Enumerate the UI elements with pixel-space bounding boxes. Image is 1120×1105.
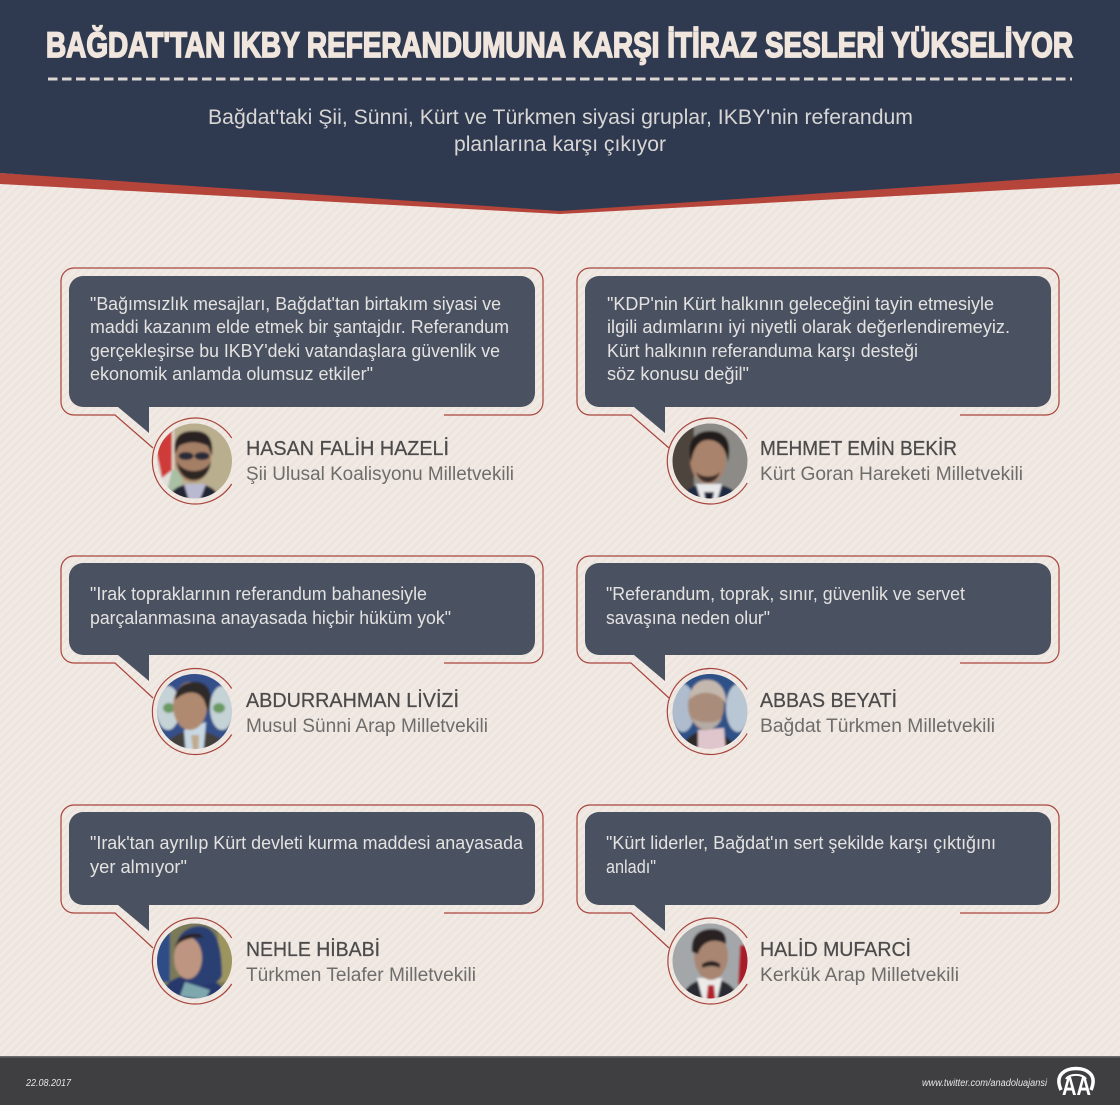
subtitle: planlarına karşı çıkıyor	[454, 133, 666, 156]
quote: parçalanmasına anayasada hiçbir hüküm yok"	[90, 608, 451, 628]
portrait	[152, 417, 232, 505]
quote: söz konusu değil"	[607, 364, 749, 384]
portrait	[665, 918, 755, 1006]
name: NEHLE HİBABİ	[246, 938, 380, 961]
quote	[607, 294, 1010, 384]
quote: "Kürt liderler, Bağdat'ın sert şekilde karşı çıktığını	[606, 833, 996, 853]
role: Kürt Goran Hareketi Milletvekili	[760, 464, 1023, 485]
quote	[606, 584, 965, 628]
name: MEHMET EMİN BEKİR	[760, 437, 957, 460]
subtitle: Bağdat'taki Şii, Sünni, Kürt ve Türkmen siyasi gruplar, IKBY'nin referandum	[208, 106, 913, 129]
panel: Mehmet Emin Bekir	[577, 268, 1059, 506]
quote	[90, 294, 509, 384]
quote: "Referandum, toprak, sınır, güvenlik ve servet	[606, 584, 965, 604]
quote	[606, 833, 996, 877]
panel: Nehle Hibabi	[61, 805, 543, 1006]
quote: savaşına neden olur"	[606, 608, 770, 628]
quote: ekonomik anlamda olumsuz etkiler"	[90, 364, 373, 384]
role: Musul Sünni Arap Milletvekili	[246, 716, 488, 737]
quote: yer almıyor"	[90, 857, 187, 877]
speech bubble	[69, 812, 535, 931]
date: 22.08.2017	[25, 1078, 71, 1089]
quote: "Bağımsızlık mesajları, Bağdat'tan birtakım siyasi ve	[90, 294, 501, 314]
quote: "KDP'nin Kürt halkının geleceğini tayin etmesiyle	[607, 294, 994, 314]
name: ABBAS BEYATİ	[760, 689, 897, 712]
footer bar	[0, 1056, 1120, 1105]
portrait	[665, 418, 755, 506]
quote: Kürt halkının referanduma karşı desteği	[607, 341, 918, 361]
quote: anladı"	[606, 857, 656, 877]
panel: Abdurrahman Livizi	[61, 556, 543, 756]
header banner	[0, 0, 1120, 214]
quote: maddi kazanım elde etmek bir şantajdır. Referandum	[90, 317, 509, 337]
panel: Abbas Beyati	[577, 556, 1059, 756]
name: ABDURRAHMAN LİVİZİ	[246, 689, 459, 712]
role: Türkmen Telafer Milletvekili	[246, 965, 476, 986]
quote: gerçekleşirse bu IKBY'deki vatandaşlara güvenlik ve	[90, 341, 500, 361]
icon: AA logo: AA	[1062, 1071, 1091, 1101]
quote: "Irak'tan ayrılıp Kürt devleti kurma maddesi anayasada	[90, 833, 524, 853]
name: HALİD MUFARCİ	[760, 938, 911, 961]
quote	[90, 833, 524, 877]
portrait	[150, 668, 240, 756]
role: Şii Ulusal Koalisyonu Milletvekili	[246, 464, 514, 485]
portrait	[150, 918, 240, 1006]
speech bubble	[585, 812, 1051, 931]
source url: www.twitter.com/anadoluajansi	[922, 1078, 1048, 1089]
quote: "Irak topraklarının referandum bahanesiyle	[90, 584, 427, 604]
panel: Halid Mufarci	[577, 805, 1059, 1006]
subtitle	[208, 106, 913, 156]
role: Kerkük Arap Milletvekili	[760, 965, 959, 986]
quote	[90, 584, 451, 628]
name: HASAN FALİH HAZELİ	[246, 437, 449, 460]
role: Bağdat Türkmen Milletvekili	[760, 716, 995, 737]
portrait	[665, 668, 755, 756]
speech bubble	[69, 276, 535, 433]
quote: ilgili adımlarını iyi niyetli olarak değerlendiremeyiz.	[607, 317, 1010, 337]
panel: Hasan Falih Hazeli	[61, 268, 543, 506]
speech bubble	[585, 563, 1051, 681]
speech bubble	[69, 563, 535, 681]
speech bubble	[585, 276, 1051, 433]
